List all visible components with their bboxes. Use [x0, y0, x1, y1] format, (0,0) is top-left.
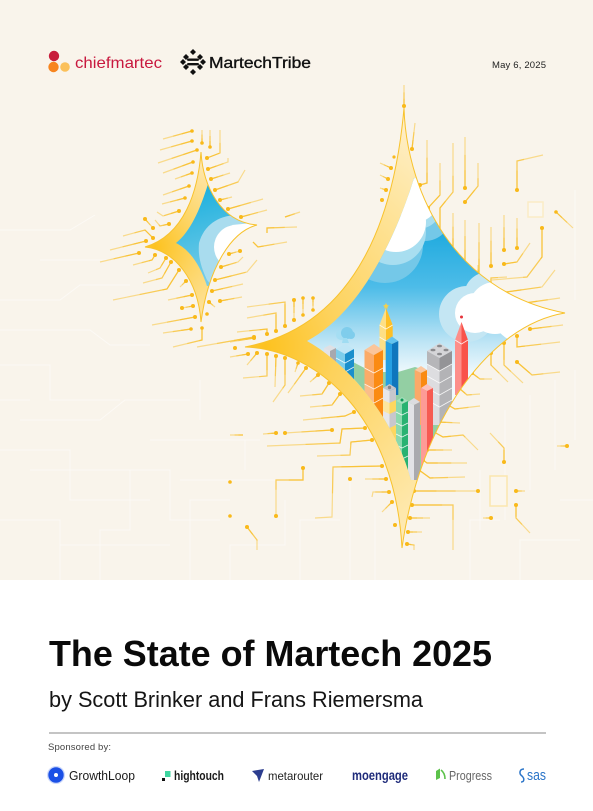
- building cyan with cloud: [336, 327, 355, 385]
- circuit traces, stronger near the dots: [100, 85, 573, 550]
- big star scene: [307, 178, 562, 480]
- right cloud: [439, 274, 562, 342]
- hero background panel: [0, 0, 593, 580]
- background white circuit pattern: [0, 190, 593, 580]
- MartechTribe wordmark: MartechTribe: [209, 55, 311, 72]
- building grey tall: [408, 398, 420, 482]
- sponsor: sas: sas: [527, 768, 546, 784]
- sponsor: sas: [520, 768, 546, 784]
- building grey brick: [427, 343, 452, 425]
- chiefmartec logo: [48, 51, 162, 72]
- MartechTribe logo: [180, 49, 311, 75]
- big star band: [245, 108, 565, 548]
- sponsor: hightouch: [162, 769, 224, 783]
- sponsored by label: Sponsored by:: [48, 742, 111, 753]
- sponsor: metarouter: metarouter: [268, 769, 323, 783]
- top cloud: [368, 178, 443, 283]
- circuit traces, strongest near the dots: [100, 85, 573, 550]
- building red: [421, 384, 433, 467]
- small star sky: [176, 185, 254, 286]
- circuit chip upper right: [528, 202, 543, 217]
- circuit traces, faint full length: [100, 85, 573, 550]
- date: May 6, 2025: [492, 60, 546, 71]
- MartechTribe mark: [180, 49, 206, 75]
- building blue: [386, 336, 398, 395]
- sponsor: Progress: Progress: [449, 769, 492, 783]
- circuit trace end dots: [137, 104, 569, 546]
- building red spire: [455, 316, 468, 395]
- building yellow spire: [380, 303, 393, 360]
- building orange small: [415, 366, 427, 425]
- big star outline: [245, 108, 565, 548]
- sponsor: Progress: [436, 768, 492, 783]
- small star window: [145, 152, 270, 322]
- divider: [49, 732, 546, 734]
- green hills: [345, 362, 439, 480]
- byline: by Scott Brinker and Frans Riemersma: [49, 687, 424, 712]
- building small grey: [324, 345, 336, 362]
- big star window with city: [245, 108, 580, 548]
- sky: [307, 178, 508, 480]
- sponsor: moengage: moengage: [352, 768, 408, 783]
- building orange: [364, 344, 383, 420]
- small star outline: [145, 152, 257, 322]
- sponsor: GrowthLoop: GrowthLoop: [69, 768, 135, 783]
- building green: [396, 397, 408, 480]
- circuit chip lower right: [490, 476, 507, 506]
- sponsor: GrowthLoop: [47, 766, 135, 784]
- sponsor: hightouch: hightouch: [174, 769, 224, 783]
- chiefmartec mark: [48, 51, 70, 72]
- title: The State of Martech 2025: [49, 633, 492, 674]
- building stacked light: [383, 384, 396, 440]
- chiefmartec wordmark: chiefmartec: [75, 55, 162, 72]
- small star band: [145, 152, 257, 322]
